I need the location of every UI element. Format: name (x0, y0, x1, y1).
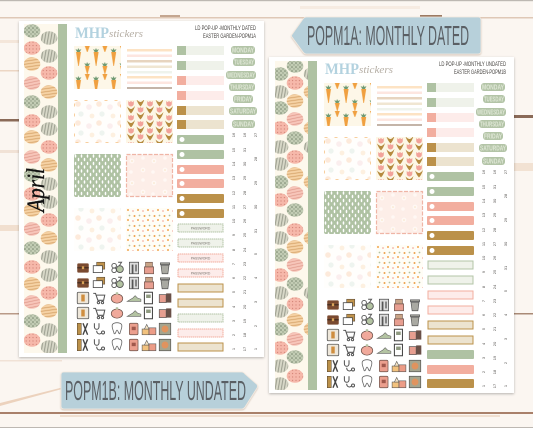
date stickers: 4 (503, 313, 508, 316)
date stickers: 23 (492, 298, 497, 303)
date stickers: 12 (481, 227, 486, 232)
date stickers: 17 (492, 383, 497, 388)
date stickers: 8 (231, 248, 236, 251)
weekday labels: THURSDAY (230, 84, 254, 92)
MHP stickers logo: stickers (109, 29, 143, 40)
date stickers: 30 (503, 241, 508, 246)
date stickers: 18 (492, 369, 497, 374)
solid labels (427, 350, 474, 388)
date stickers: 9 (231, 233, 236, 236)
date stickers: 24 (242, 247, 247, 252)
date stickers: 31 (253, 228, 258, 233)
sheet heading (439, 61, 506, 76)
password labels: PASSWORD (191, 226, 211, 230)
sticker sheet: POPM1B monthly undated (269, 57, 514, 393)
weekday labels: FRIDAY (234, 96, 252, 104)
date stickers: 3 (503, 337, 508, 340)
panel: tulips (376, 137, 423, 180)
date stickers: 22 (492, 312, 497, 317)
panel: pastel dots 2 (324, 245, 371, 288)
password labels: PASSWORD (191, 242, 211, 246)
date stickers: 28 (503, 193, 508, 198)
date stickers: 15 (481, 184, 486, 189)
weekday labels (226, 46, 257, 128)
outlined labels (178, 284, 223, 351)
date stickers: 7 (231, 262, 236, 265)
panel: carrots (74, 46, 121, 89)
date stickers: 29 (242, 175, 247, 180)
weekday labels: TUESDAY (234, 60, 254, 66)
date stickers: 4 (481, 342, 486, 345)
date stickers: 13 (231, 175, 236, 180)
date stickers: 22 (242, 275, 247, 280)
MHP stickers logo (325, 61, 393, 78)
weekday labels: WEDNESDAY (227, 72, 255, 80)
panel: daisies (126, 154, 172, 196)
date stickers: 2 (503, 361, 508, 364)
date stickers: 1 (503, 384, 508, 387)
text: POPM1B: MONTHLY UNDATED (65, 375, 246, 406)
date stickers: 19 (492, 355, 497, 360)
date stickers: 18 (242, 332, 247, 337)
date stickers: 16 (492, 169, 497, 174)
date stickers: 27 (492, 241, 497, 246)
date stickers: 31 (503, 265, 508, 270)
date stickers: 28 (253, 156, 258, 161)
date stickers: 5 (231, 290, 236, 293)
date stickers: 13 (481, 212, 486, 217)
date stickers: 5 (481, 327, 486, 330)
date stickers: 7 (481, 299, 486, 302)
date stickers: 2 (481, 370, 486, 373)
date stickers: 3 (231, 319, 236, 322)
date stickers: 29 (492, 212, 497, 217)
date stickers: 5 (253, 252, 258, 255)
date stickers: 27 (242, 204, 247, 209)
date stickers: 28 (242, 190, 247, 195)
date stickers: 26 (242, 218, 247, 223)
date stickers: 26 (492, 255, 497, 260)
date stickers: 2 (231, 333, 236, 336)
panel: daisies (376, 192, 422, 234)
date stickers: 25 (242, 232, 247, 237)
panel: tulips (126, 100, 173, 143)
egg pattern strip (24, 24, 67, 354)
date stickers (231, 132, 258, 351)
date stickers: 20 (492, 341, 497, 346)
date stickers: 10 (481, 255, 486, 260)
date stickers: 29 (503, 217, 508, 222)
date stickers: 5 (503, 289, 508, 292)
April script label: April (23, 168, 50, 214)
panel: orange dots (126, 208, 173, 251)
date stickers: 14 (231, 161, 236, 166)
date stickers: 29 (253, 180, 258, 185)
panel: pastel dots (74, 100, 120, 142)
date stickers: 27 (253, 132, 258, 137)
date stickers: 6 (481, 313, 486, 316)
date stickers: 30 (492, 198, 497, 203)
panel: carrots (324, 83, 371, 126)
date stickers: 24 (492, 284, 497, 289)
banner: POPM1A monthly dated (292, 17, 481, 54)
panel: sage raindrops (74, 154, 121, 197)
date stickers: 6 (231, 276, 236, 279)
date stickers: 15 (231, 147, 236, 152)
weekday labels: MONDAY (482, 84, 504, 92)
date stickers: 30 (253, 204, 258, 209)
panel: pastel dots (324, 138, 370, 180)
date stickers: 31 (492, 184, 497, 189)
date stickers: 23 (242, 261, 247, 266)
date stickers: 4 (231, 305, 236, 308)
password labels: PASSWORD (191, 256, 211, 260)
weekday labels: SATURDAY (480, 146, 506, 152)
MHP stickers logo: MHP (325, 61, 359, 78)
date stickers: 21 (492, 326, 497, 331)
date stickers: 16 (231, 132, 236, 137)
weekday labels: MONDAY (232, 48, 254, 54)
date stickers (481, 169, 508, 388)
date stickers: 11 (231, 204, 236, 209)
date stickers: 3 (253, 300, 258, 303)
date stickers: 17 (242, 346, 247, 351)
date stickers: 16 (481, 169, 486, 174)
panel: stripes (126, 46, 173, 89)
panel: pastel dots 2 (74, 208, 121, 251)
sticker sheet: POPM1A monthly dated (19, 21, 264, 357)
weekday labels: SATURDAY (230, 108, 256, 116)
weekday labels: TUESDAY (484, 96, 504, 104)
date stickers: 19 (242, 318, 247, 323)
icon grid (77, 262, 171, 351)
date stickers: 30 (242, 161, 247, 166)
date stickers: 1 (253, 347, 258, 350)
hole-punch labels (177, 135, 224, 218)
egg pattern strip (275, 61, 317, 390)
date stickers: 14 (481, 198, 486, 203)
date stickers: 31 (242, 147, 247, 152)
weekday labels: SUNDAY (233, 122, 254, 128)
icon grid (327, 299, 421, 388)
date stickers: 4 (253, 276, 258, 279)
panel: orange dots (376, 245, 423, 288)
date stickers: 16 (242, 132, 247, 137)
sheet heading: EASTER GARDEN-POPM1A (203, 33, 256, 40)
date stickers: 1 (481, 384, 486, 387)
password labels (178, 224, 223, 277)
date stickers: 10 (231, 218, 236, 223)
date stickers: 20 (242, 304, 247, 309)
header bars (177, 46, 224, 129)
date stickers: 9 (481, 270, 486, 273)
date stickers: 28 (492, 227, 497, 232)
date stickers: 2 (253, 324, 258, 327)
MHP stickers logo: MHP (75, 25, 109, 42)
panel: stripes (376, 83, 423, 126)
sheet heading: LD POP-UP -MONTHLY DATED (195, 25, 256, 32)
MHP stickers logo: stickers (359, 65, 393, 76)
date stickers: 3 (481, 356, 486, 359)
date stickers: 8 (481, 285, 486, 288)
date stickers: 25 (492, 269, 497, 274)
weekday labels: THURSDAY (480, 122, 504, 128)
date stickers: 27 (503, 169, 508, 174)
weekday labels: SUNDAY (483, 158, 504, 166)
date stickers: 11 (481, 241, 486, 246)
hole-punch labels (427, 172, 474, 255)
weekday labels (476, 83, 507, 166)
sheet heading (195, 25, 256, 40)
header bars (427, 83, 474, 166)
outlined labels (428, 261, 473, 344)
weekday labels: WEDNESDAY (477, 110, 505, 116)
MHP stickers logo (75, 25, 143, 42)
weekday labels: FRIDAY (484, 134, 502, 140)
date stickers: 1 (231, 347, 236, 350)
panel: sage raindrops (324, 191, 371, 234)
password labels: PASSWORD (191, 272, 211, 276)
date stickers: 12 (231, 190, 236, 195)
date stickers: 21 (242, 289, 247, 294)
banner: POPM1B monthly undated (61, 372, 258, 409)
